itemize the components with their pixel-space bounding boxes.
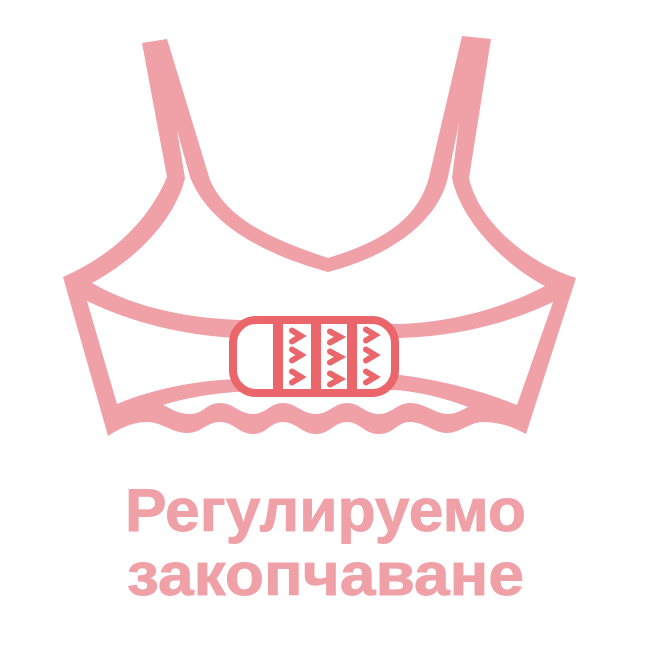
opening between bands bbox=[87, 301, 553, 405]
clasp frame bbox=[233, 320, 395, 393]
clasp divider 2 bbox=[311, 318, 321, 394]
icon: adjustable clasp bbox=[233, 318, 395, 394]
heading bbox=[125, 477, 526, 608]
cup opening bbox=[92, 123, 545, 324]
icon: bra outline bbox=[63, 36, 576, 436]
heading line 2: закопчаване bbox=[127, 541, 524, 608]
clasp divider 3 bbox=[347, 318, 357, 394]
heading line 1: Регулируемо bbox=[125, 477, 526, 544]
clasp hooks bbox=[292, 330, 375, 384]
clasp divider 1 bbox=[273, 318, 283, 394]
bra silhouette bbox=[63, 36, 576, 436]
gap above wavy hem bbox=[163, 390, 468, 414]
